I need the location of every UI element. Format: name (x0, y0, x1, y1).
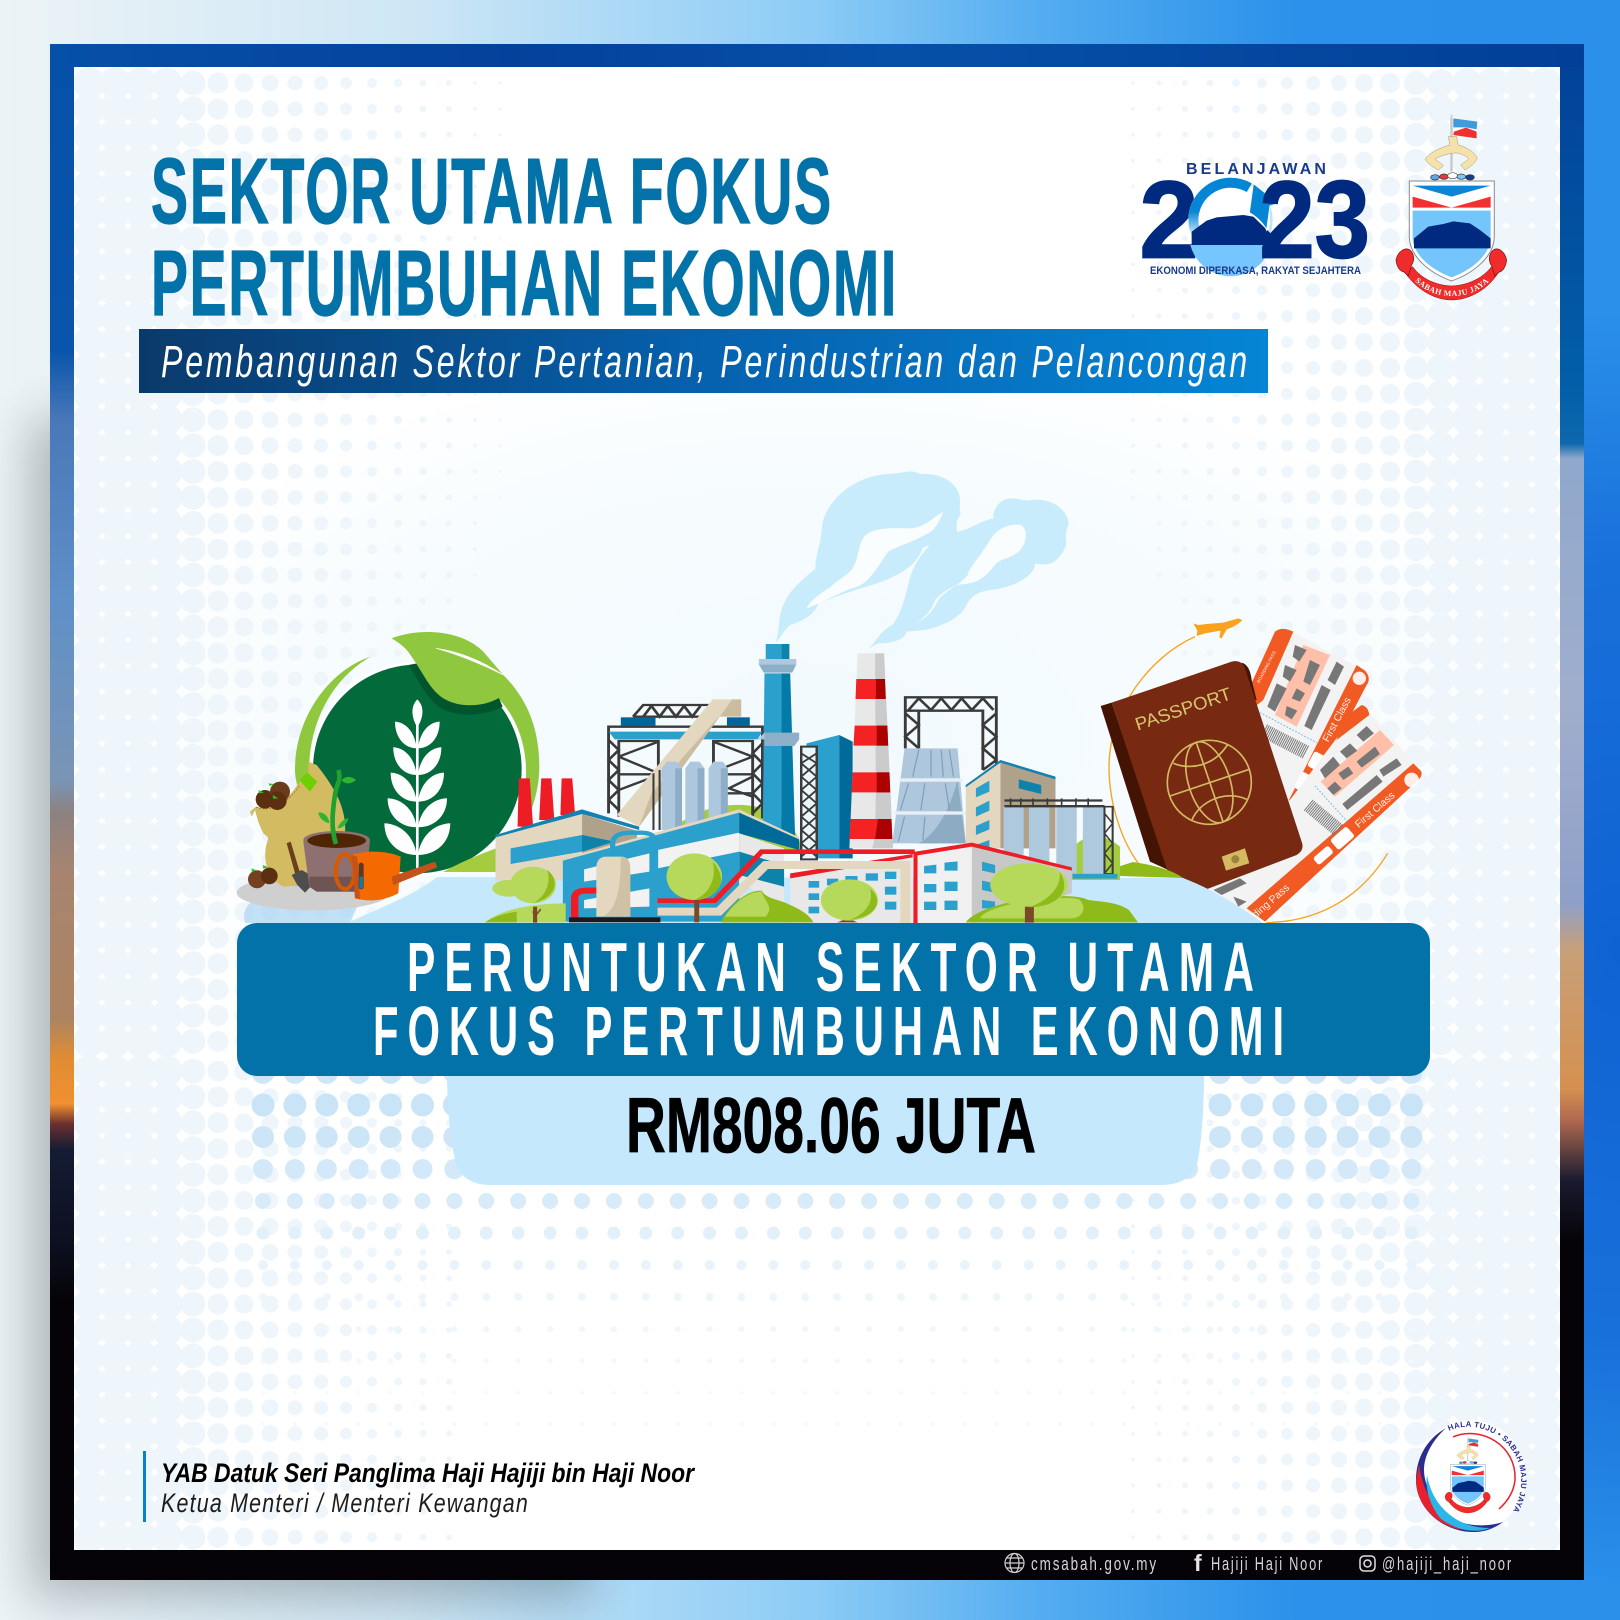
left steel truss (609, 705, 762, 818)
flight orbit (1109, 637, 1388, 923)
passport: PASSPORT (1133, 684, 1234, 734)
facebook: f (1194, 1550, 1202, 1576)
logo: Hala Tuju Sabah Maju Jaya (1416, 1420, 1526, 1532)
boarding pass 1: Boarding Pass (1251, 820, 1291, 882)
green crescents (295, 657, 371, 790)
boarding pass 2 (1207, 705, 1422, 935)
shovel (287, 842, 301, 877)
cooling tower (892, 748, 966, 843)
illustration: background ground (347, 847, 1263, 923)
sprout (333, 770, 339, 844)
logo: Belanjawan 2023: 23 (1259, 159, 1370, 282)
logo: Sabah crest: SABAH MAJU JAYA (1415, 278, 1489, 296)
green disc (310, 662, 525, 876)
illustration: tourism tickets and passport (1101, 618, 1422, 935)
attribution (143, 1451, 695, 1522)
footer contacts (1005, 1550, 1513, 1576)
conveyor (617, 699, 732, 827)
logo: Sabah crest (1396, 114, 1507, 300)
pot (303, 842, 370, 892)
allocation amount: RM808.06 JUTA (626, 1081, 1036, 1169)
back green (672, 805, 802, 853)
white building right (913, 843, 1072, 923)
watering can (336, 852, 437, 900)
boarding pass 1: First Class (1321, 696, 1354, 744)
pale ellipse behind dish (244, 895, 360, 923)
banner heading (373, 928, 1293, 1070)
smoke plumes (776, 471, 1069, 651)
boarding pass 1: BOARDING PASS (1256, 650, 1277, 684)
instagram: @hajiji_haji_noor (1382, 1554, 1513, 1575)
logo: Belanjawan 2023: EKONOMI DIPERKASA, RAKYAT SEJAHTERA (1150, 265, 1361, 277)
trees and bushes (485, 853, 1138, 923)
right silos (1004, 798, 1118, 879)
dish (237, 875, 390, 910)
right steel truss (905, 697, 996, 770)
logo: Belanjawan 2023 (1139, 159, 1370, 282)
leaf shadow (408, 662, 503, 715)
passport (1101, 661, 1303, 889)
attribution: Ketua Menteri / Menteri Kewangan (161, 1488, 529, 1518)
icon: plane (1193, 618, 1242, 638)
boarding pass 2: Boarding Pass (1234, 883, 1292, 935)
front left building (496, 809, 639, 881)
boarding pass 1 (1250, 629, 1369, 882)
light blue amount box (447, 1070, 1204, 1185)
blue tower (801, 735, 853, 859)
subtitle banner (139, 329, 1268, 393)
main title: PERTUMBUHAN EKONOMI (151, 231, 898, 335)
logo: Belanjawan 2023: BELANJAWAN (1186, 161, 1326, 178)
blue chimney (758, 644, 799, 837)
front middle building (563, 809, 799, 922)
seeds (256, 790, 274, 809)
logo: Belanjawan 2023: 2 (1139, 159, 1199, 282)
allocation banner (237, 923, 1430, 1076)
main title (151, 139, 898, 335)
illustration: agriculture emblem (295, 632, 539, 876)
white building left (790, 854, 913, 923)
sack (250, 762, 345, 887)
logo: Hala Tuju Sabah Maju Jaya: HALA TUJU • SABAH MAJU JAYA (1448, 1421, 1526, 1512)
leaf (392, 632, 510, 705)
illustration: farm items (237, 762, 437, 910)
facebook: Hajiji Haji Noor (1211, 1554, 1324, 1574)
striped chimney (849, 653, 893, 848)
attribution: YAB Datuk Seri Panglima Haji Hajiji bin Haji Noor (161, 1458, 695, 1488)
silos (662, 762, 728, 830)
tag (299, 773, 317, 792)
website (1005, 1554, 1158, 1574)
illustration: factory complex (485, 471, 1138, 923)
facebook (1194, 1550, 1324, 1576)
light blue hill (347, 877, 1263, 923)
icon: wheat (384, 699, 450, 870)
website: cmsabah.gov.my (1031, 1554, 1158, 1574)
boarding pass 2: First Class (1353, 790, 1397, 831)
instagram (1360, 1554, 1513, 1575)
red stacks (518, 778, 575, 827)
pipes (658, 852, 915, 901)
main title: SEKTOR UTAMA FOKUS (151, 139, 833, 243)
right tan building (966, 760, 1056, 848)
